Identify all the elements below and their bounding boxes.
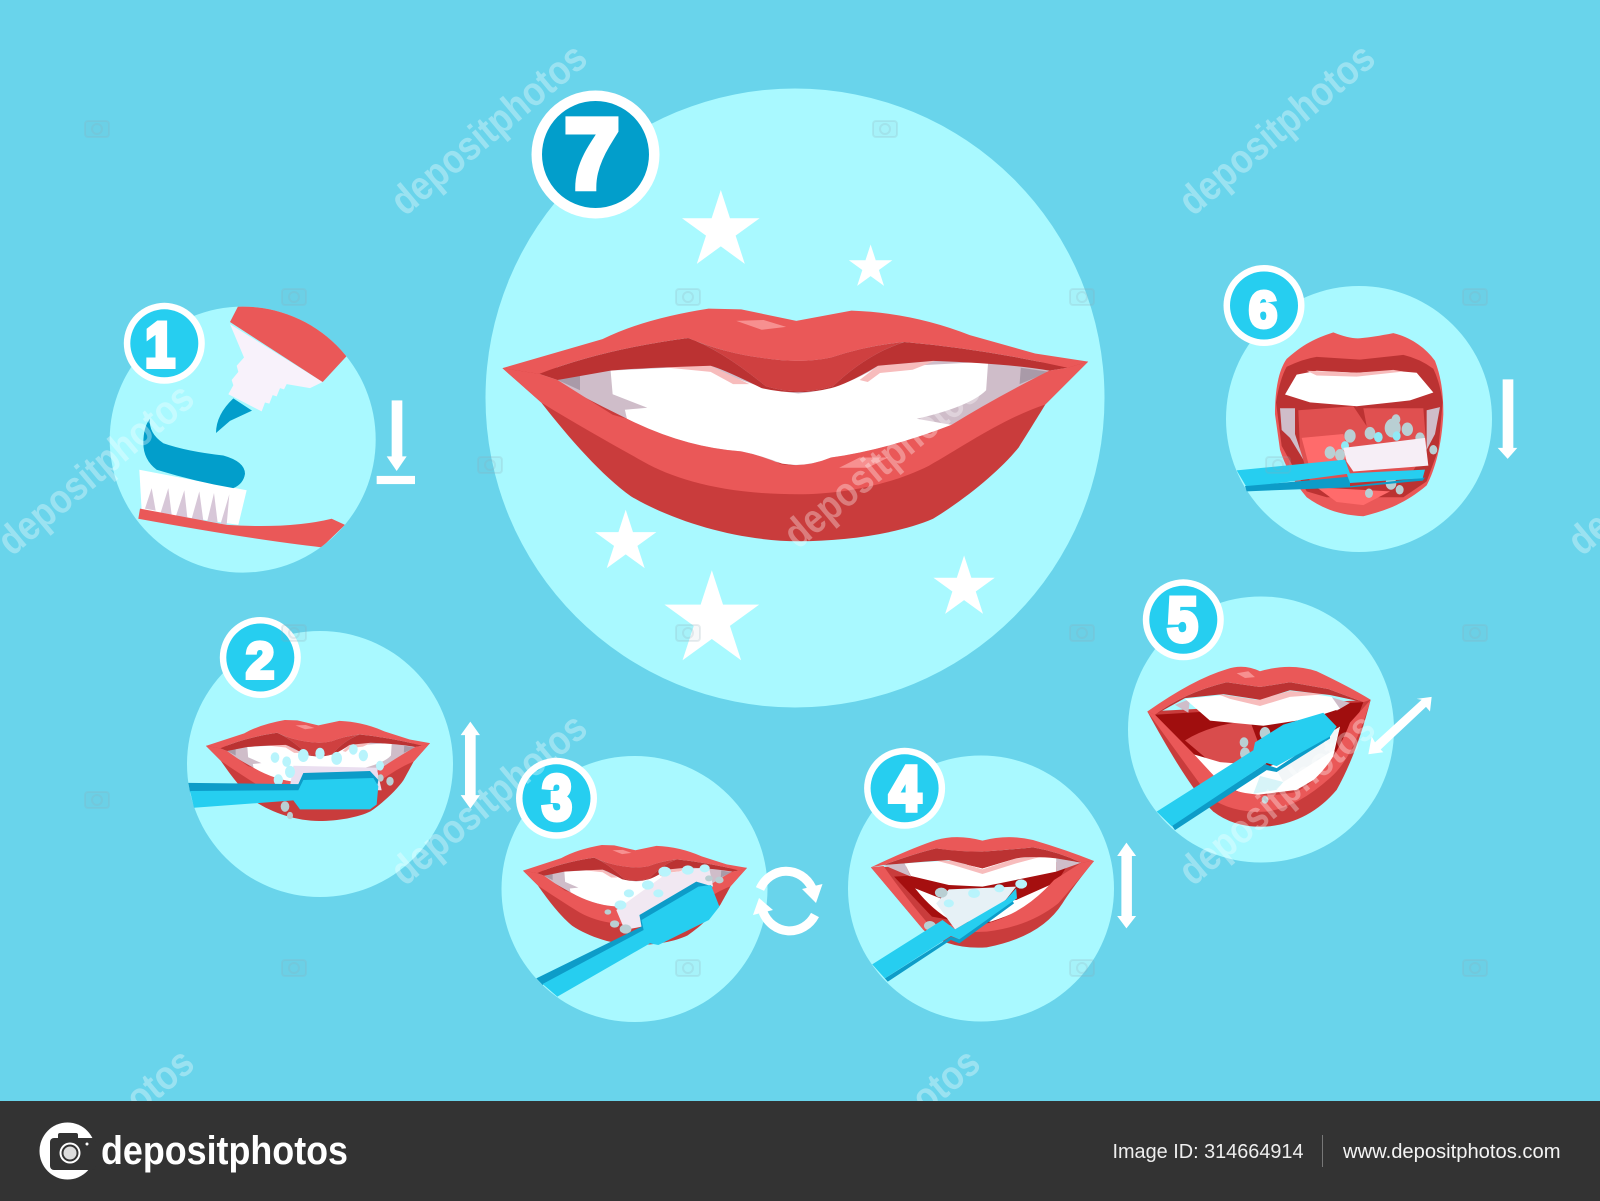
toothpaste and toothbrush bbox=[138, 304, 357, 547]
badge 4: 4 bbox=[889, 754, 921, 824]
watermark: depositphotos text: depositphotos bbox=[1169, 34, 1383, 224]
badge 1: 1 bbox=[145, 310, 175, 381]
toothbrush 3 with foam bbox=[536, 864, 724, 997]
website url: www.depositphotos.com bbox=[1342, 1141, 1560, 1163]
lips 2 bbox=[206, 720, 430, 821]
badge 6: 6 bbox=[1249, 281, 1277, 338]
panel 3: circular brushing bbox=[502, 756, 822, 1022]
watermark: depositphotos text: depositphotos bbox=[381, 704, 595, 894]
badge 3 bbox=[516, 758, 597, 839]
arrow: up and down bbox=[1117, 843, 1136, 928]
open lips 5 bbox=[1147, 667, 1371, 827]
panel 1: toothpaste on brush bbox=[110, 303, 415, 573]
lips 3 bbox=[523, 845, 747, 945]
footer logo icon bbox=[40, 1122, 96, 1180]
arrow: diagonal back and forth bbox=[1368, 697, 1432, 754]
panel 7: final smile bbox=[486, 88, 1104, 708]
open mouth 6 bbox=[1275, 332, 1443, 516]
watermark: depositphotos text: depositphotos bbox=[1169, 704, 1383, 894]
toothbrush 2 with foam bbox=[188, 744, 394, 819]
watermark: camera icons bbox=[85, 121, 1487, 976]
watermark: depositphotos text: depositphotos bbox=[381, 34, 595, 224]
circle 6 bbox=[1226, 286, 1492, 552]
badge 7 bbox=[532, 90, 660, 218]
badge 6 bbox=[1224, 265, 1304, 346]
badge 5: 5 bbox=[1167, 586, 1198, 655]
large smiling lips bbox=[502, 309, 1088, 541]
arrow: circular motion bbox=[753, 871, 822, 931]
arrow: down to line bbox=[377, 400, 415, 484]
circle 2 bbox=[187, 631, 453, 897]
badge 2 bbox=[220, 617, 301, 698]
circle 4 bbox=[848, 756, 1114, 1022]
footer logo wordmark: depositphotos bbox=[101, 1129, 348, 1173]
panel 2: brush front teeth bbox=[187, 617, 480, 897]
open lips 4 bbox=[871, 837, 1094, 948]
arrow: down bbox=[1498, 379, 1517, 459]
badge 2: 2 bbox=[246, 632, 274, 689]
badge 5 bbox=[1143, 579, 1224, 660]
circle 7 bbox=[486, 88, 1104, 708]
badge 3: 3 bbox=[542, 763, 572, 834]
watermark: depositphotos text: depositphotos bbox=[774, 367, 988, 557]
panel 4: inner teeth brushing bbox=[848, 748, 1136, 1022]
badge 7: 7 bbox=[565, 98, 619, 208]
arrow: up and down bbox=[461, 722, 480, 809]
circle 3 bbox=[502, 756, 768, 1022]
toothbrush 4 with foam bbox=[872, 879, 1027, 982]
toothbrush 5 with foam bbox=[1157, 713, 1340, 830]
stars bbox=[595, 190, 995, 660]
panel 6: brush the tongue bbox=[1224, 265, 1517, 552]
image id: Image ID: 314664914 bbox=[1112, 1141, 1304, 1163]
toothbrush 6 with foam bbox=[1237, 414, 1437, 498]
panel 5: outer back teeth bbox=[1128, 579, 1432, 862]
footer bar bbox=[0, 1101, 1600, 1201]
circle 1 bbox=[110, 307, 376, 573]
badge 1 bbox=[124, 303, 205, 384]
circle 5 bbox=[1128, 596, 1394, 862]
badge 4 bbox=[864, 748, 945, 829]
